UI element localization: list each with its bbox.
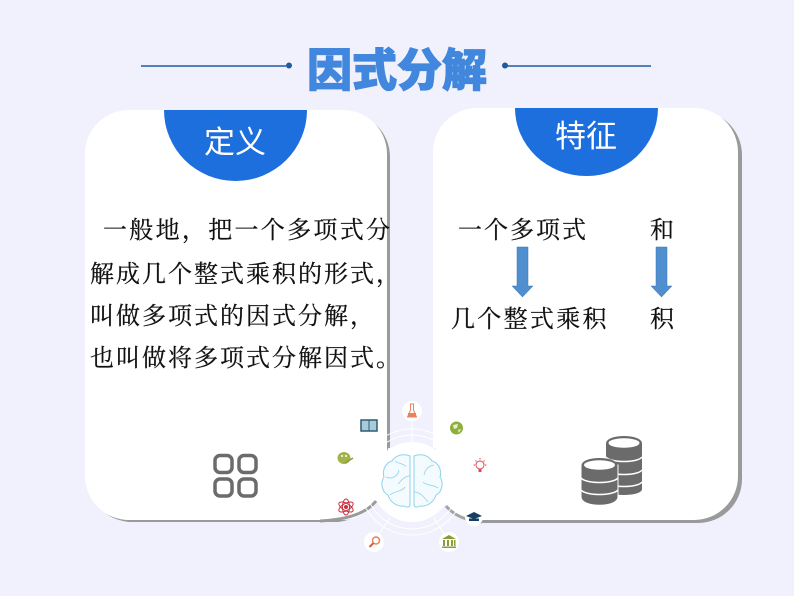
- brain wheel: [320, 401, 486, 552]
- panel: definition: [85, 110, 408, 522]
- right title line: [502, 62, 651, 68]
- icon: book: [361, 420, 377, 431]
- bottom row text: 几个整式乘积: [451, 306, 609, 333]
- definition text: 也叫做将多项式分解因式。: [90, 345, 402, 372]
- curved shadow left: [320, 501, 376, 521]
- curved shadow right: [446, 506, 482, 522]
- icon: four squares: [215, 456, 256, 496]
- white hub: [372, 442, 452, 522]
- arrow: polynomial to product: [512, 247, 533, 297]
- definition text: 一般地，把一个多项式分: [103, 217, 392, 244]
- title text: 因式分解: [307, 45, 487, 96]
- heading badge: definition: [164, 110, 307, 181]
- top row text: 和: [650, 217, 674, 244]
- definition text: 叫做多项式的因式分解，: [90, 303, 376, 330]
- icon: museum: [439, 532, 459, 552]
- heading badge: features: [515, 108, 658, 176]
- arrow: sum to product: [651, 247, 672, 297]
- background band under the wheel: [320, 448, 480, 526]
- icon: brain: [382, 455, 442, 507]
- panel shadow: [88, 113, 390, 522]
- icon: palette: [338, 452, 353, 464]
- hub rings: [359, 420, 465, 537]
- icon: magnifier: [364, 532, 384, 552]
- icon: light bulb: [474, 458, 486, 472]
- icon: flask: [402, 401, 422, 421]
- icon: globe: [450, 422, 463, 434]
- panel body: [433, 108, 738, 520]
- left panel fragment: [320, 440, 375, 520]
- definition text: 解成几个整式乘积的形式，: [90, 261, 402, 288]
- bottom row text: 积: [650, 306, 675, 333]
- panel: features: [433, 108, 742, 523]
- heading badge: definition: 定义: [204, 125, 266, 160]
- heading badge: features: 特征: [555, 119, 617, 154]
- top row text: 一个多项式: [458, 217, 588, 244]
- icon: atom: [337, 499, 355, 515]
- icon: graduation cap: [465, 508, 483, 526]
- panel shadow: [436, 111, 742, 523]
- panel body: [85, 110, 387, 520]
- left title line: [141, 62, 292, 68]
- title: [141, 45, 651, 96]
- icon: coin stacks: [581, 436, 642, 505]
